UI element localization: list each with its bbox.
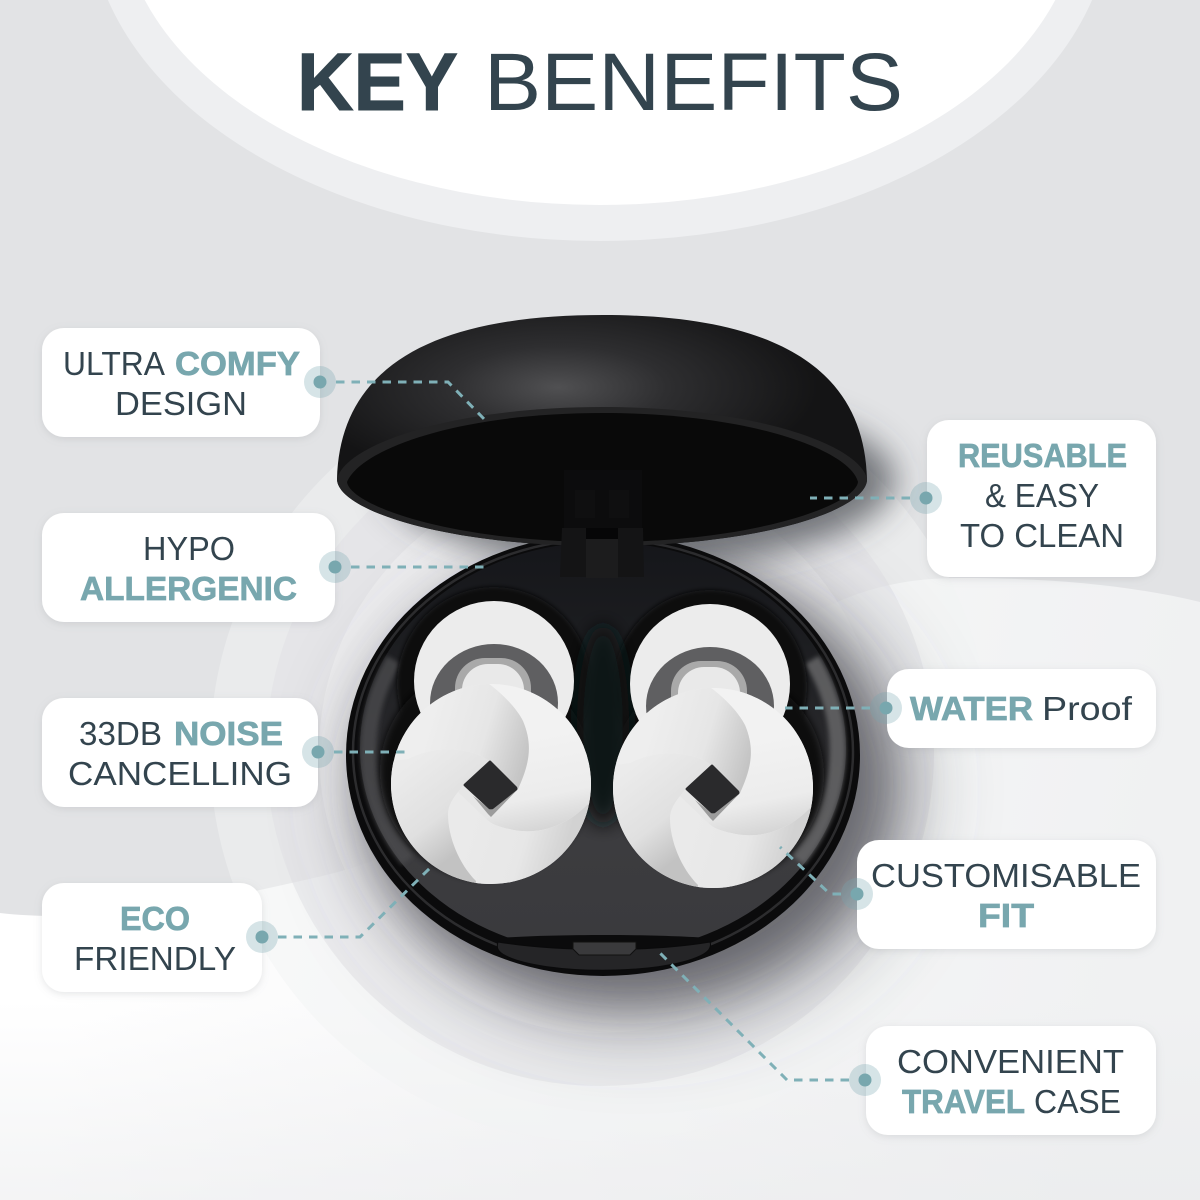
- front well right: [624, 710, 829, 878]
- callout: convenient travel case: CASE: [1034, 1083, 1121, 1120]
- lid dome: [337, 315, 867, 546]
- latch band: [497, 942, 711, 970]
- ear well right: [620, 589, 808, 717]
- lower background fade: [0, 1000, 1200, 1200]
- callout: 33db noise cancelling: NOISE: [174, 715, 283, 752]
- case shadow: [350, 395, 920, 1030]
- callout: water proof: [785, 669, 1156, 748]
- callout: convenient travel case: [657, 950, 1156, 1135]
- callout: eco friendly: FRIENDLY: [74, 940, 236, 977]
- callout: hypo allergenic: [42, 513, 487, 622]
- earplug right: [593, 604, 833, 908]
- callout: convenient travel case: CONVENIENT: [897, 1043, 1124, 1080]
- callout: convenient travel case: TRAVEL: [902, 1083, 1025, 1120]
- title: KEY: [297, 37, 458, 128]
- case base: [346, 534, 860, 976]
- front well left: [376, 706, 585, 878]
- callout: 33db noise cancelling: [42, 698, 407, 807]
- callout: reusable and easy to clean: REUSABLE: [958, 437, 1127, 474]
- latch tab: [573, 942, 636, 955]
- top white ellipse: [120, 0, 1080, 205]
- callout: customisable fit: FIT: [978, 897, 1034, 934]
- lid underside: [347, 413, 858, 542]
- center channel: [582, 625, 622, 831]
- case rim: [346, 534, 860, 976]
- callout: reusable and easy to clean: TO CLEAN: [960, 517, 1124, 554]
- earplug left: [371, 601, 611, 904]
- callout: ultra comfy design: [42, 328, 487, 437]
- callout: reusable and easy to clean: & EASY: [985, 477, 1099, 514]
- callout: ultra comfy design: COMFY: [175, 345, 300, 382]
- top outer ellipse: [89, 0, 1111, 241]
- case floor: [360, 542, 846, 954]
- callout: customisable fit: CUSTOMISABLE: [871, 857, 1141, 894]
- hinge: [560, 470, 644, 578]
- callout: eco friendly: [42, 866, 432, 992]
- concentric rings: [210, 362, 990, 1142]
- lid: [337, 315, 867, 546]
- ear well left: [395, 586, 586, 718]
- side highlights: [368, 660, 408, 860]
- lower background wave: [0, 578, 1200, 1200]
- callout: hypo allergenic: ALLERGENIC: [80, 570, 297, 607]
- callout: ultra comfy design: DESIGN: [115, 385, 247, 422]
- title: [297, 37, 903, 128]
- callout: hypo allergenic: HYPO: [143, 530, 235, 567]
- callout: customisable fit: [780, 840, 1156, 949]
- callout: eco friendly: ECO: [120, 900, 190, 937]
- callout: 33db noise cancelling: CANCELLING: [68, 755, 292, 792]
- callout: ultra comfy design: ULTRA: [63, 345, 165, 382]
- callout: water proof: WATER: [910, 690, 1033, 727]
- lid rim: [337, 407, 867, 546]
- callout: reusable and easy to clean: [810, 420, 1156, 577]
- callout: 33db noise cancelling: 33DB: [79, 715, 162, 752]
- title: BENEFITS: [484, 37, 903, 128]
- callout: water proof: Proof: [1042, 690, 1133, 727]
